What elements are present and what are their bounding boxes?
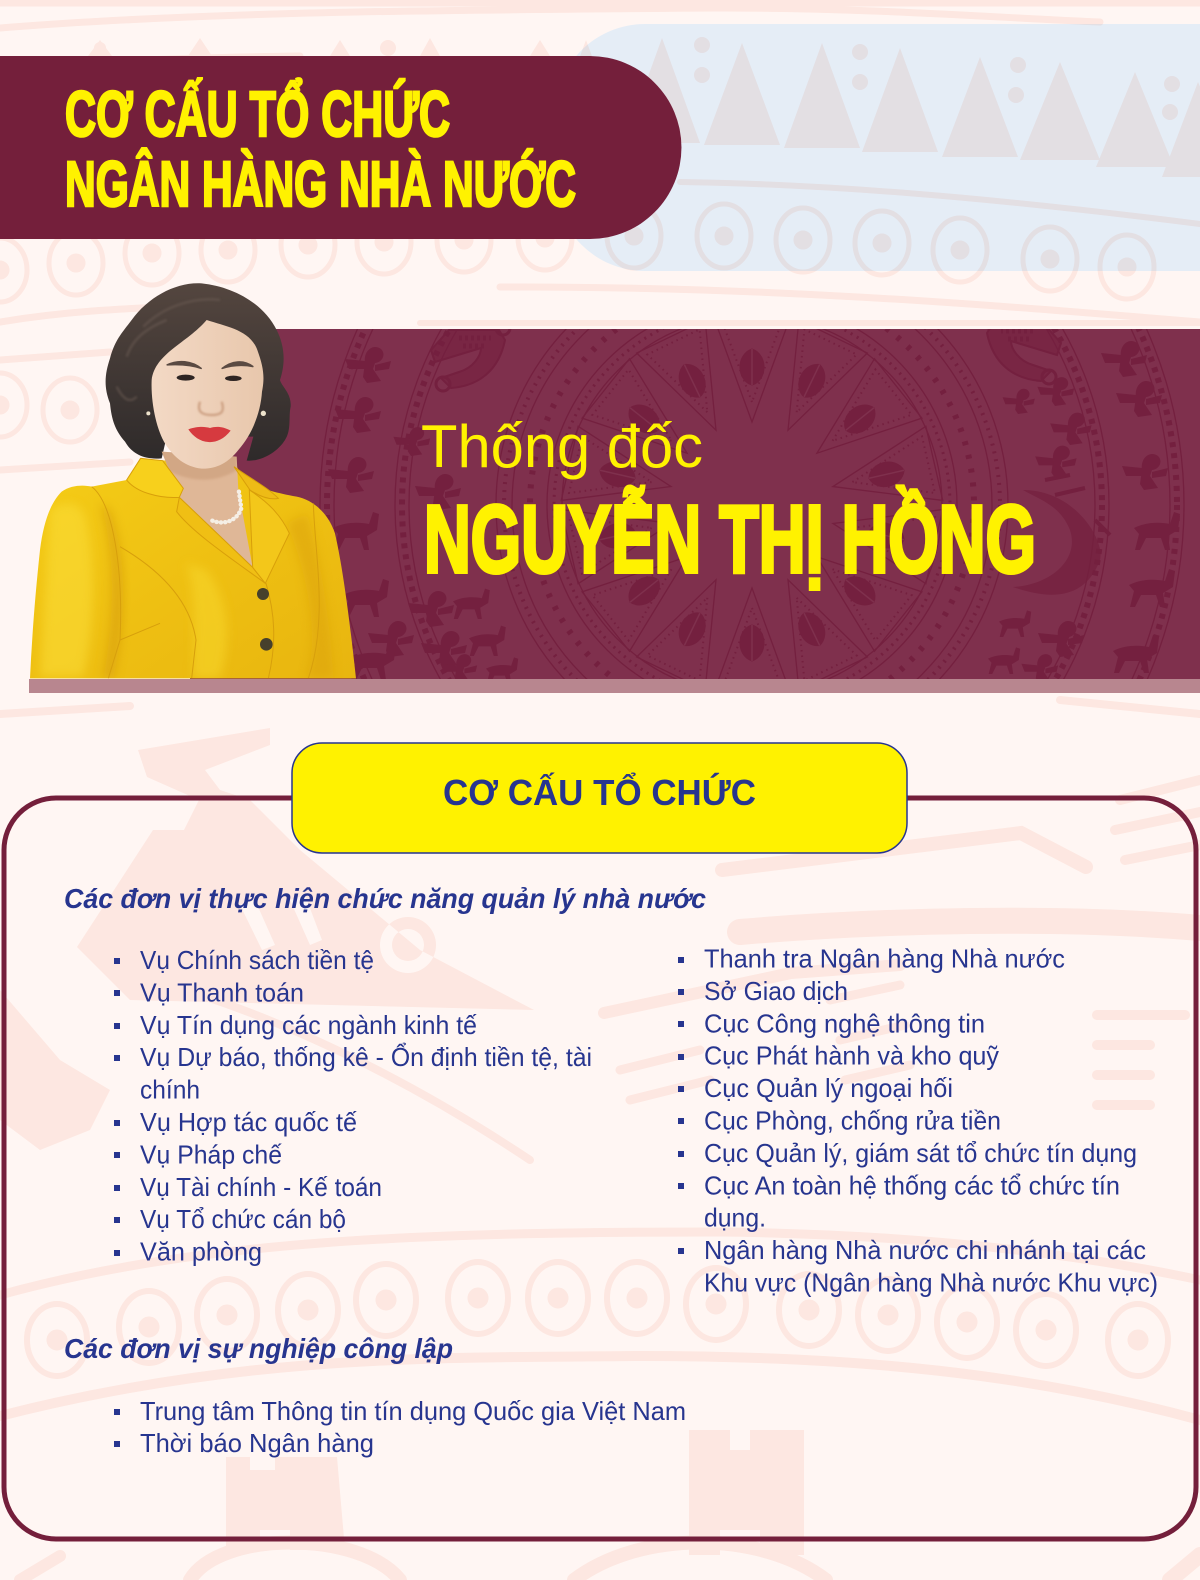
face — [152, 320, 263, 469]
list: right column: Cục Quản lý ngoại hối — [704, 1073, 953, 1103]
list: right column — [678, 944, 1158, 1298]
list: left column: chính — [140, 1075, 200, 1105]
neck shadow — [162, 452, 237, 480]
list: right column: Cục Công nghệ thông tin — [704, 1008, 985, 1038]
portrait: governor — [30, 283, 356, 678]
title line 2: NGÂN HÀNG NHÀ NƯỚC — [65, 147, 576, 220]
list: left column — [114, 945, 592, 1267]
list: right column: Cục An toàn hệ thống các tổ chức tín — [704, 1170, 1120, 1200]
eyes — [177, 375, 195, 381]
drum pattern — [320, 329, 1184, 679]
title line 1: CƠ CẤU TỔ CHỨC — [65, 77, 450, 150]
list: left column: Vụ Dự báo, thống kê - Ổn định tiền tệ, tài — [140, 1042, 592, 1072]
list: public service units — [114, 1396, 686, 1458]
heading text: CƠ CẤU TỔ CHỨC — [443, 770, 756, 813]
list: left column: Vụ Pháp chế — [140, 1139, 283, 1169]
list: left column: Vụ Hợp tác quốc tế — [140, 1107, 358, 1137]
neck and chest — [162, 452, 253, 567]
list: left column: Văn phòng — [140, 1237, 262, 1267]
panel: organization frame — [4, 798, 1196, 1539]
earrings — [261, 411, 266, 416]
hair — [106, 283, 291, 461]
list: left column: Vụ Tổ chức cán bộ — [140, 1204, 346, 1234]
list: right column: Cục Phát hành và kho quỹ — [704, 1041, 999, 1071]
base strip — [29, 679, 1200, 693]
list: left column: Vụ Tài chính - Kế toán — [140, 1172, 382, 1202]
heading: public service units: Các đơn vị sự nghiệp công lập — [64, 1333, 453, 1364]
nose — [199, 402, 223, 415]
panel: governor band with bronze drum — [29, 73, 1200, 937]
heading: state management units: Các đơn vị thực hiện chức năng quản lý nhà nước — [64, 883, 706, 914]
list: right column: Ngân hàng Nhà nước chi nhánh tại các — [704, 1235, 1146, 1265]
list: right column: Khu vực (Ngân hàng Nhà nước Khu vực) — [704, 1268, 1158, 1298]
lapels — [127, 458, 289, 583]
jacket shading — [40, 503, 333, 678]
list: right column: Cục Quản lý, giám sát tổ chức tín dụng — [704, 1138, 1137, 1168]
triangles — [548, 38, 1200, 177]
list: right column: Cục Phòng, chống rửa tiền — [704, 1106, 1001, 1136]
jacket seams — [92, 487, 319, 678]
eyebrows — [167, 362, 253, 369]
hair strands — [117, 299, 220, 400]
buttons — [257, 588, 269, 600]
jacket — [30, 458, 356, 678]
list: left column: Vụ Thanh toán — [140, 977, 304, 1007]
text: governor role: Thống đốc — [421, 413, 703, 480]
list: left column: Vụ Tín dụng các ngành kinh tế — [140, 1010, 478, 1040]
chain of circles — [0, 204, 1168, 1376]
panel: title banner — [0, 56, 681, 239]
lips — [188, 427, 231, 442]
big bird — [77, 728, 534, 1010]
pearl necklace — [212, 490, 241, 522]
heading box — [292, 743, 907, 853]
list: public service units: Trung tâm Thông tin tín dụng Quốc gia Việt Nam — [140, 1396, 686, 1426]
list: right column: Sở Giao dịch — [704, 976, 848, 1006]
list: public service units: Thời báo Ngân hàng — [140, 1428, 374, 1458]
list: left column: Vụ Chính sách tiền tệ — [140, 945, 374, 975]
list: right column: Thanh tra Ngân hàng Nhà nước — [704, 944, 1065, 974]
columns — [226, 1430, 804, 1555]
list: right column: dụng. — [704, 1203, 766, 1233]
panel: light blue header backdrop — [555, 24, 1200, 271]
